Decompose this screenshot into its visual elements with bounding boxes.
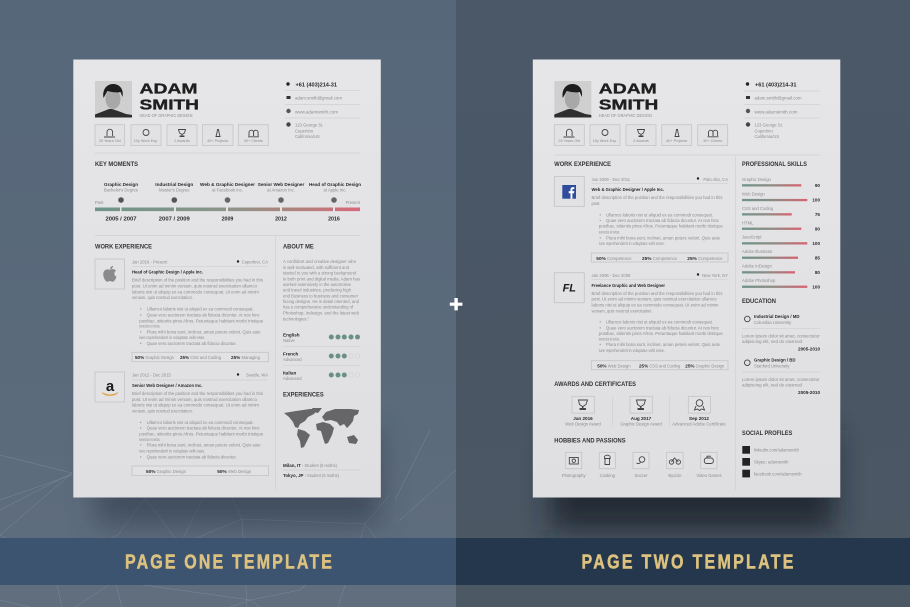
skills box: 25% Competence bbox=[687, 256, 723, 261]
job: amazon: posthac, sitientis piros Afros. Petuntaque habitant morbi tristique bbox=[139, 431, 264, 436]
education entries: adipiscing elit, sed do eiusmod bbox=[742, 339, 803, 344]
stat boxes: 25 Years Old bbox=[99, 139, 121, 143]
job: apple: veniam, quis nostrud exercitation. bbox=[132, 295, 193, 300]
name: SMITH bbox=[140, 98, 199, 114]
skill bars: HTML bbox=[742, 220, 754, 225]
skill bars bbox=[742, 177, 820, 289]
contact block bbox=[285, 82, 360, 139]
contact block: adam.smith@gmail.com bbox=[295, 96, 343, 100]
background: right panel bbox=[456, 0, 910, 607]
logo box: FL: FL bbox=[563, 282, 576, 294]
stat boxes: 25 Years Old bbox=[558, 139, 580, 143]
hobbies bbox=[562, 452, 722, 478]
timeline: Industrial Design bbox=[155, 182, 193, 187]
plus sign bbox=[450, 298, 462, 310]
job: amazon: Seattle, WA bbox=[246, 373, 268, 378]
about text: started to you with a strong background bbox=[283, 271, 357, 276]
contact block: 123 George St. bbox=[754, 122, 783, 128]
heading: work experience: WORK EXPERIENCE bbox=[95, 244, 152, 250]
paper shadow right bbox=[550, 430, 835, 530]
resume page two bbox=[533, 60, 840, 498]
hobbies: Cooking bbox=[600, 473, 616, 478]
timeline: at Apple Inc. bbox=[323, 188, 347, 192]
contact block: Cupertino bbox=[754, 128, 773, 134]
education entries: Stanford University bbox=[754, 363, 790, 368]
skill bars: 90 bbox=[815, 183, 820, 188]
paper shadow left bbox=[95, 430, 380, 525]
background: left panel bbox=[0, 0, 456, 607]
education entries bbox=[742, 314, 820, 395]
stat boxes: 40+ Projects bbox=[666, 139, 687, 143]
hobbies: Video Games bbox=[696, 473, 722, 478]
job: freelance: New York, NY bbox=[702, 273, 728, 278]
education entries: Lorem ipsum dolor sit amet, consectetur bbox=[742, 334, 820, 338]
about text: Photoshop, Indesign, and the latest web bbox=[283, 310, 360, 315]
job: apple: • bbox=[140, 312, 142, 317]
job: facebook: Brief description of the position and the responsibilities you had in this bbox=[592, 195, 722, 200]
about text: is well-motivated, with sufficient and bbox=[283, 265, 350, 270]
job: freelance bbox=[554, 273, 728, 370]
about text bbox=[283, 259, 360, 322]
contact block: California/US bbox=[295, 134, 320, 139]
job: facebook: Quae vero auctorem tractata ab fiducia dicuntur. At nos hinc bbox=[606, 218, 719, 223]
awards: Aug 2017 bbox=[631, 416, 652, 421]
job: amazon bbox=[95, 372, 268, 475]
timeline: Master's Degree bbox=[159, 188, 190, 192]
about text: A confident and creative designer who bbox=[283, 259, 357, 264]
contact block: 123 George St. bbox=[295, 122, 323, 128]
hobbies: Photography bbox=[562, 473, 586, 478]
job: amazon: • bbox=[140, 426, 142, 431]
skills box: 25% Managing bbox=[231, 355, 261, 360]
skills box bbox=[591, 361, 728, 370]
portrait bbox=[95, 81, 132, 118]
awards: Graphic Design Award bbox=[620, 422, 662, 427]
timeline: Bachelor's Degree bbox=[104, 188, 139, 192]
job: freelance: iure reprehenderit in voluptate velit esse. bbox=[599, 348, 665, 353]
job: facebook: Jun 2009 - Dec 2011 bbox=[592, 177, 631, 182]
job: apple: Plura mihi bona sunt, inclinet, aman petere velont. Quis aute bbox=[147, 329, 261, 334]
social list: linkedin.com/adamsmith bbox=[754, 448, 800, 453]
timeline: Web & Graphic Designer bbox=[200, 182, 255, 187]
awards: Advanced Adobe Certificate bbox=[672, 422, 726, 427]
skills box bbox=[591, 253, 728, 262]
timeline: Graphic Design bbox=[104, 182, 138, 187]
skills box: 50% Graphic Design bbox=[135, 355, 175, 360]
job: amazon: senectus et netus. bbox=[139, 437, 160, 442]
stat boxes: 30+ Clients bbox=[703, 139, 722, 143]
heading: hobbies: HOBBIES AND PASSIONS bbox=[554, 438, 626, 444]
education entries: Industrial Design / MD bbox=[754, 314, 800, 319]
skill bars: 75 bbox=[815, 212, 820, 217]
timeline: Past bbox=[95, 200, 104, 205]
stat boxes bbox=[554, 125, 728, 146]
timeline: 2007 / 2009 bbox=[159, 216, 190, 222]
job: apple: Quae vero auctorem tractata ab fiducia dicuntur. At nos hinc bbox=[147, 312, 260, 317]
job title: HEAD OF GRAPHIC DESIGN bbox=[140, 113, 192, 118]
education entries: 2005-2010 bbox=[798, 346, 820, 352]
contact block: www.adamsmith.com bbox=[754, 110, 798, 114]
portrait bbox=[554, 81, 591, 118]
job: freelance: post. Ut enim ad minim veniam, quis nostrud exercitation ullamco bbox=[592, 297, 717, 302]
job: facebook: • bbox=[600, 218, 602, 223]
job: freelance: • bbox=[600, 325, 602, 330]
logo box: amazon: a bbox=[106, 378, 115, 395]
job: apple: Ullamco laboris nisi ut aliquid ex ea commodi consequat. bbox=[147, 307, 254, 312]
job: amazon: • bbox=[140, 420, 142, 425]
stat boxes: 2 Awards bbox=[174, 139, 190, 143]
contact block: +61 (403)214-31 bbox=[755, 82, 797, 88]
education entries: Lorem ipsum dolor sit amet, consectetur bbox=[742, 377, 820, 382]
skill bars: Adobe Illustrator bbox=[742, 249, 773, 254]
languages: Italian bbox=[283, 370, 296, 376]
job: facebook: Palo Alto, CA bbox=[703, 177, 728, 182]
contact block: +61 (403)214-31 bbox=[296, 82, 338, 88]
skills box: 25% Competence bbox=[642, 256, 678, 261]
about text: and travel industries, producing high bbox=[283, 288, 352, 293]
job: facebook: Web & Graphic Designer / Apple Inc. bbox=[592, 187, 664, 192]
logo box: facebook bbox=[554, 176, 584, 206]
skill bars: 90 bbox=[815, 226, 820, 231]
job: apple bbox=[95, 259, 268, 362]
timeline: at Facebook Inc. bbox=[212, 188, 243, 192]
timeline: 2005 / 2007 bbox=[106, 216, 137, 222]
banner: right bbox=[456, 538, 910, 585]
job: facebook: • bbox=[600, 213, 602, 218]
job: freelance: senectus et netus. bbox=[599, 336, 620, 342]
banner title: page one: PAGE ONE TEMPLATE bbox=[125, 551, 332, 573]
skill bars: 100 bbox=[812, 198, 820, 203]
locations bbox=[283, 463, 360, 478]
heading: work experience: WORK EXPERIENCE bbox=[554, 162, 611, 168]
job: amazon: Plura mihi bona sunt, inclinet, aman petere velont. Quis aute bbox=[147, 443, 261, 448]
locations: Tokyo, JP › Student (6 moths) bbox=[283, 473, 340, 478]
languages: Advanced bbox=[283, 376, 302, 381]
awards: Jan 2016 bbox=[573, 416, 593, 421]
skill bars: CSS and Coding bbox=[742, 206, 774, 211]
languages: English bbox=[283, 332, 300, 338]
job: freelance: Brief description of the position and the responsibilities you had in this bbox=[592, 291, 722, 296]
skills box: 25% CSS and Coding bbox=[180, 355, 222, 360]
job: freelance: Freelance Graphic and Web Designer bbox=[592, 283, 665, 288]
skills box: 25% CSS and Coding bbox=[639, 364, 681, 369]
logo box: amazon bbox=[95, 372, 124, 402]
job title: HEAD OF GRAPHIC DESIGN bbox=[599, 113, 652, 118]
social list: facebook.com/adamsmith bbox=[754, 471, 802, 476]
skill bars: 85 bbox=[815, 255, 820, 260]
job: facebook bbox=[554, 176, 728, 262]
job: freelance: laboris nisi ut aliquip ex ea commodo consequat. Ut enim ad minim bbox=[592, 302, 719, 307]
skill bars: JavaScript bbox=[742, 235, 762, 240]
awards: Web Design Award bbox=[565, 422, 601, 427]
job: amazon: veniam, quis nostrud exercitation. bbox=[132, 408, 193, 413]
name: SMITH bbox=[599, 98, 658, 114]
job: facebook: senectus et netus. bbox=[599, 229, 620, 234]
name bbox=[140, 82, 199, 118]
job: freelance: Jan 2006 - Dec 2008 bbox=[592, 273, 631, 278]
locations: Milan, IT › Student (6 moths) bbox=[283, 463, 338, 468]
timeline bbox=[95, 182, 361, 222]
timeline: 2012 bbox=[275, 216, 287, 222]
job: amazon: Jan 2012 - Dec 2015 bbox=[132, 373, 172, 378]
contact block: California/US bbox=[754, 134, 779, 139]
job: apple: • bbox=[140, 307, 142, 312]
logo box: FL bbox=[554, 273, 584, 303]
timeline: Head of Graphic Design bbox=[309, 182, 361, 187]
skills box: 50% Competence bbox=[596, 256, 632, 261]
social list: Skype: adamsmith bbox=[754, 460, 789, 464]
awards bbox=[565, 396, 726, 427]
banner title: page two: PAGE TWO TEMPLATE bbox=[582, 551, 794, 573]
heading: experiences: EXPERIENCES bbox=[283, 392, 324, 398]
job: apple: Brief description of the position and the responsibilities you had in this bbox=[132, 278, 263, 283]
heading: education: EDUCATION bbox=[742, 299, 776, 305]
job: amazon: laboris nisi ut aliquip ex ea commodo consequat. Ut enim ad minim bbox=[132, 403, 260, 408]
job: freelance: veniam, quis nostrud exercitation. bbox=[592, 308, 652, 313]
skills box: 50% Graphic Design bbox=[146, 469, 187, 474]
job: facebook: iure reprehenderit in voluptate velit esse. bbox=[599, 241, 665, 246]
skill bars: 100 bbox=[812, 284, 820, 289]
timeline: 2016 bbox=[328, 216, 340, 222]
skills box: 25% Graphic Design bbox=[685, 364, 725, 369]
skills box bbox=[132, 352, 268, 362]
stat boxes: 2 Awards bbox=[633, 139, 649, 143]
job: amazon: Senior Web Designer / Amazon Inc. bbox=[132, 383, 202, 388]
contact block bbox=[744, 82, 820, 139]
job: freelance: Quae vero auctorem tractata ab fiducia dicuntur. At nos hinc bbox=[606, 325, 719, 330]
skill bars: 100 bbox=[812, 241, 820, 246]
job: freelance: Ullamco laboris nisi ut aliquid ex ea commodi consequat. bbox=[606, 319, 713, 324]
heading: key moments: KEY MOMENTS bbox=[95, 162, 138, 168]
logo box: apple bbox=[95, 259, 124, 289]
job: facebook: Plura mihi bona sunt, inclinet, aman petere velont. Quis aute bbox=[606, 236, 721, 240]
about text: end Business to business and consumer bbox=[283, 293, 359, 298]
about text: in both print and digital media. Adam has bbox=[283, 276, 360, 281]
job: facebook: • bbox=[600, 236, 602, 240]
skill bars: 80 bbox=[815, 270, 820, 275]
hobbies: Bycicle bbox=[668, 473, 682, 478]
job: apple: laboris nisi ut aliquip ex ea commodo consequat. Ut enim ad minim bbox=[132, 289, 260, 294]
skill bars: Web Design bbox=[742, 192, 765, 196]
skills box: 50% Web Design bbox=[217, 469, 252, 474]
about text: has a comprehensive understanding of bbox=[283, 305, 354, 310]
heading: social profiles: SOCIAL PROFILES bbox=[742, 431, 792, 437]
world map bbox=[284, 408, 359, 448]
skill bars: Graphic Design bbox=[742, 177, 772, 182]
heading: professional skills: PROFESSIONAL SKILLS bbox=[742, 162, 807, 168]
job: apple: Head of Graphic Design / Apple Inc. bbox=[132, 270, 203, 274]
job: facebook: Ullamco laboris nisi ut aliquid ex ea commodi consequat. bbox=[606, 213, 713, 218]
skills box bbox=[132, 466, 268, 475]
timeline: Senior Web Designer bbox=[258, 182, 304, 187]
job: amazon: Quae vero auctorem tractata ab fiducia dicuntur. bbox=[147, 454, 237, 459]
stat boxes: 40+ Projects bbox=[207, 139, 228, 143]
name: ADAM bbox=[140, 82, 198, 98]
stat boxes: 10y Work Exp. bbox=[593, 139, 617, 143]
job: amazon: post. Ut enim ad minim veniam, quis nostrud exercitation ullamco bbox=[132, 397, 258, 402]
job: amazon: • bbox=[140, 443, 142, 448]
job: apple: Quae vero auctorem tractata ab fiducia dicuntur. bbox=[147, 341, 237, 346]
education entries: Graphic Design / BD bbox=[754, 358, 796, 362]
skills box: 50% Web Design bbox=[597, 364, 631, 369]
job: apple: posthac, sitientis piros Afros. Petuntaque habitant morbi tristique bbox=[139, 318, 264, 323]
heading: about me: ABOUT ME bbox=[283, 244, 314, 250]
stat boxes bbox=[95, 125, 268, 146]
languages: Native bbox=[283, 338, 296, 343]
contact block: adam.smith@gmail.com bbox=[754, 96, 802, 100]
job: apple: iure reprehenderit in voluptate velit esse. bbox=[139, 335, 205, 340]
social list bbox=[742, 446, 802, 477]
contact block: www.adamsmith.com bbox=[295, 110, 339, 114]
languages: French bbox=[283, 352, 299, 356]
name bbox=[599, 82, 658, 118]
education entries: 2005-2010 bbox=[798, 390, 820, 395]
contact block: Cupertino bbox=[295, 128, 314, 134]
about text: facing designs. He is detail oriented, and bbox=[283, 299, 360, 304]
job: amazon: iure reprehenderit in voluptate velit esse. bbox=[139, 448, 205, 453]
job: freelance: • bbox=[600, 342, 602, 347]
job: amazon: Ullamco laboris nisi ut aliquid ex ea commodi consequat. bbox=[147, 420, 254, 425]
job: amazon: Brief description of the position and the responsibilities you had in this bbox=[132, 391, 263, 396]
job: apple: • bbox=[140, 329, 142, 334]
job: freelance: posthac, sitientis piros Afros. Petuntaque habitant morbi tristique bbox=[599, 331, 723, 336]
name: ADAM bbox=[599, 82, 657, 98]
education entries: Columbia University bbox=[754, 320, 792, 325]
job: amazon: Quae vero auctorem tractata ab fiducia dicuntur. At nos hinc bbox=[147, 426, 260, 431]
job: freelance: • bbox=[600, 319, 602, 324]
job: apple: Jan 2016 - Present bbox=[132, 260, 168, 264]
timeline: Present bbox=[346, 200, 361, 205]
job: apple: • bbox=[140, 341, 142, 346]
awards: Sep 2012 bbox=[689, 416, 709, 421]
stat boxes: 10y Work Exp. bbox=[134, 139, 158, 143]
job: apple: senectus et netus. bbox=[139, 324, 160, 329]
languages bbox=[283, 332, 360, 381]
languages: Advanced bbox=[283, 357, 302, 362]
job: freelance: Plura mihi bona sunt, inclinet, aman petere velont. Quis aute bbox=[606, 342, 721, 347]
timeline: 2009 bbox=[222, 216, 233, 222]
skill bars: Adobe Photoshop bbox=[742, 278, 776, 283]
stat boxes: 30+ Clients bbox=[244, 139, 263, 143]
resume page one bbox=[73, 60, 381, 498]
banner: left bbox=[0, 538, 456, 585]
hobbies: Soccer bbox=[634, 473, 648, 478]
skill bars: Adobe InDesign bbox=[742, 264, 772, 268]
about text: worked extensively in the automotive bbox=[283, 282, 352, 287]
timeline: at Amazon Inc. bbox=[267, 188, 295, 192]
job: facebook: posthac, sitientis piros Afros. Petuntaque habitant morbi tristique bbox=[599, 224, 723, 228]
heading: awards: AWARDS AND CERTIFICATES bbox=[554, 382, 636, 388]
job: apple: Cupertino, CA bbox=[242, 260, 268, 264]
job: facebook: post. bbox=[592, 201, 601, 206]
about text: technologies." bbox=[283, 317, 310, 322]
education entries: adipiscing elit, sed do eiusmod bbox=[742, 383, 803, 388]
job: amazon: • bbox=[140, 454, 142, 459]
job: apple: post. Ut enim ad minim veniam, quis nostrud exercitation ullamco bbox=[132, 284, 258, 289]
